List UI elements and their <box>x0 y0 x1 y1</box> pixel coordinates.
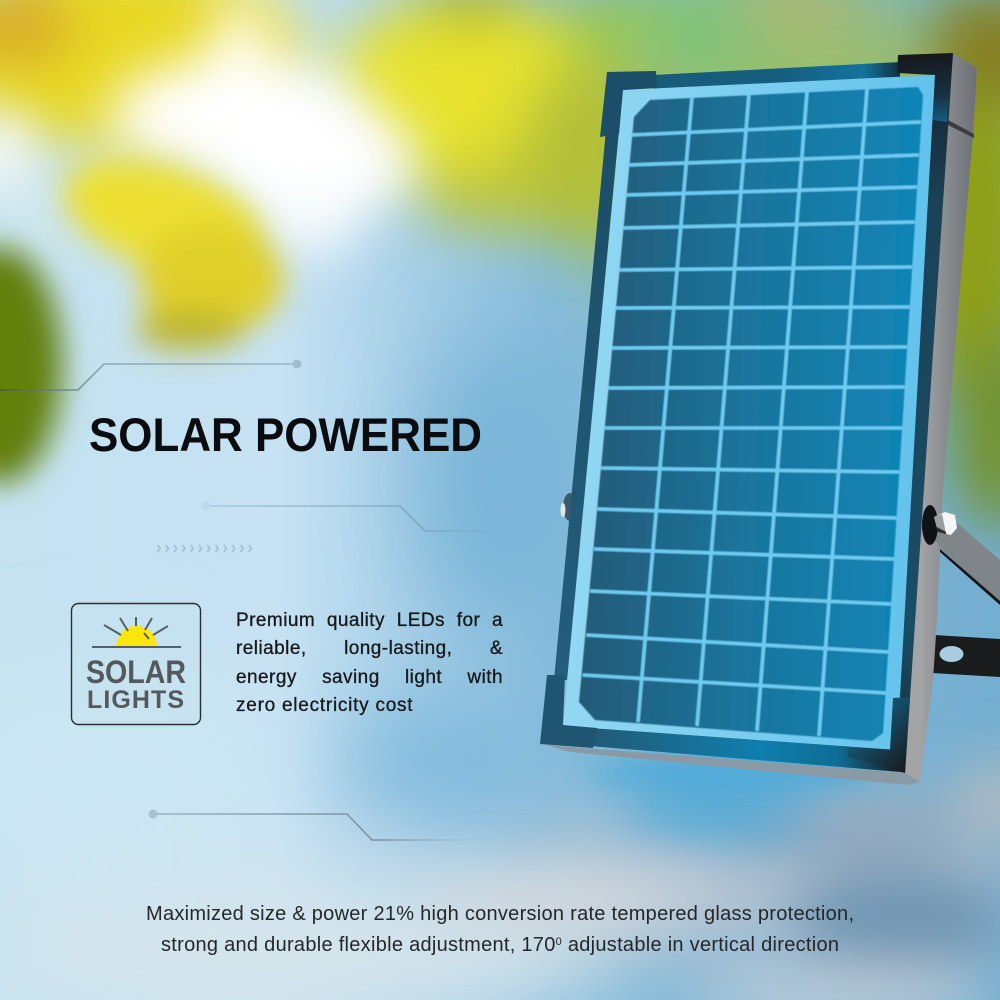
badge wordmark: SOLAR <box>86 654 186 690</box>
body description text: Premium quality LEDs for a <box>236 610 503 631</box>
badge wordmark: LIGHTS <box>87 686 184 714</box>
panel glow and shadow <box>585 754 885 790</box>
panel frame <box>554 53 953 773</box>
glass surface <box>563 75 935 750</box>
bottom description: strong and durable flexible adjustment, 170 <box>161 934 555 956</box>
bottom description <box>146 903 854 956</box>
chevron row <box>158 545 251 552</box>
bottom description: Maximized size & power 21% high conversion rate tempered glass protection, <box>146 903 854 925</box>
lower mounting bracket <box>932 635 1000 677</box>
decorative circuit line: lower <box>148 810 475 840</box>
frame corner brackets <box>540 53 953 773</box>
body description text: zero electricity cost <box>236 695 413 716</box>
decorative circuit line: upper <box>0 360 302 390</box>
panel side housing <box>545 53 977 785</box>
badge wordmark <box>86 654 186 714</box>
left hinge knob <box>560 493 577 521</box>
icon: rising sun <box>92 617 181 647</box>
body description text: reliable, long-lasting, & <box>236 638 503 659</box>
decorative circuit line: middle <box>202 502 515 531</box>
icon: solar lights badge <box>72 604 200 724</box>
upper mounting arm and bolt <box>922 505 1000 605</box>
body description text <box>236 610 503 716</box>
solar cells with grid <box>579 87 923 741</box>
solar panel product <box>540 53 1000 790</box>
bottom description: adjustable in vertical direction <box>562 934 839 956</box>
bottom description: 0 <box>556 936 562 948</box>
title: SOLAR POWERED <box>89 408 482 461</box>
body description text: energy saving light with <box>236 667 503 688</box>
